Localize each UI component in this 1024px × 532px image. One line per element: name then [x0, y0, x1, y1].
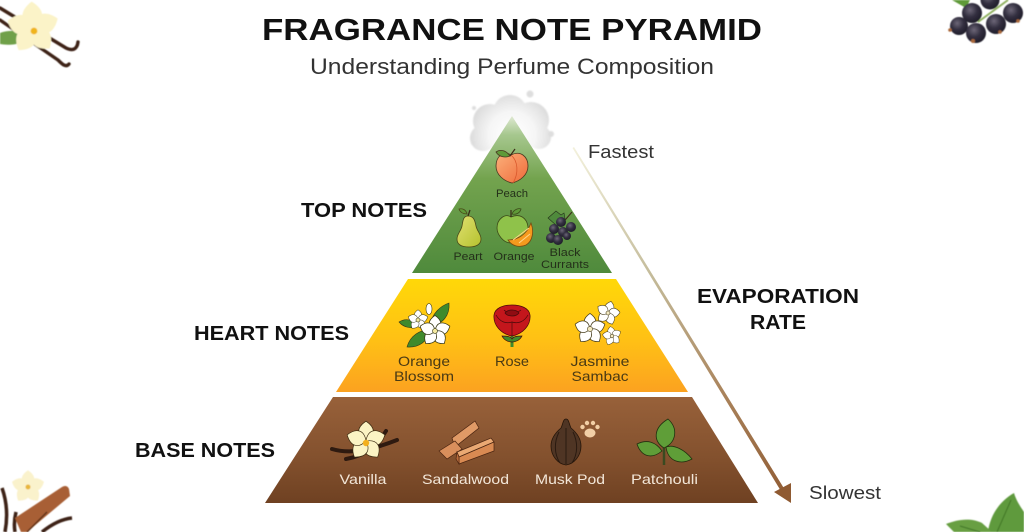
- text: jasmine sambac: Sambac: [572, 368, 628, 384]
- text: jasmine sambac: Jasmine: [570, 353, 630, 369]
- text: black currants: [541, 247, 590, 271]
- icon: black currants corner top right: [948, 0, 1023, 43]
- icon: jasmine sambac: [573, 298, 624, 348]
- icon: patchouli: [637, 419, 692, 465]
- text: black currants: Currants: [541, 259, 590, 271]
- heading: evaporation rate: [697, 286, 859, 334]
- icon: musk pod: [551, 419, 600, 465]
- text: pear: Peart: [454, 251, 482, 263]
- text: peach: Peach: [496, 188, 528, 200]
- text: orange blossom: Blossom: [394, 368, 454, 384]
- icon: orange blossom: [399, 303, 452, 347]
- heading: base notes: BASE NOTES: [135, 440, 275, 462]
- text: orange blossom: [394, 353, 454, 384]
- arrow: evaporation rate: [572, 147, 791, 503]
- icon: pear: [457, 209, 481, 247]
- text: fastest: Fastest: [588, 142, 654, 162]
- icon: vanilla: [332, 421, 397, 461]
- heading: evaporation rate: EVAPORATION: [697, 286, 859, 308]
- panel: base notes tier: [265, 397, 758, 503]
- heading: evaporation rate: RATE: [750, 312, 806, 334]
- heading: top notes: TOP NOTES: [301, 200, 427, 222]
- text: sandalwood: Sandalwood: [422, 471, 509, 487]
- panel: top notes tier: [412, 116, 612, 273]
- text: rose: Rose: [495, 353, 529, 369]
- icon: vanilla and cinnamon corner bottom left: [2, 470, 72, 532]
- text: orange: Orange: [494, 251, 534, 263]
- icon: cloud at the apex: [470, 90, 554, 156]
- heading: heart notes: HEART NOTES: [194, 323, 349, 345]
- text: musk pod: Musk Pod: [535, 471, 605, 487]
- icon: vanilla corner top left: [0, 0, 78, 66]
- icon: leaves corner bottom right: [946, 493, 1024, 532]
- icon: sandalwood: [439, 421, 494, 464]
- panel: heart notes tier: [336, 279, 688, 392]
- text: orange blossom: Orange: [398, 353, 450, 369]
- text: black currants: Black: [550, 247, 581, 259]
- icon: peach: [496, 149, 528, 183]
- text: jasmine sambac: [570, 353, 630, 384]
- icon: rose: [494, 305, 530, 347]
- subtitle: Understanding Perfume Composition: [310, 54, 714, 79]
- icon: black currants: [546, 211, 576, 245]
- text: vanilla: Vanilla: [340, 471, 387, 487]
- text: slowest: Slowest: [809, 483, 881, 503]
- icon: apple with orange slice: [497, 209, 533, 246]
- title: FRAGRANCE NOTE PYRAMID: [262, 12, 762, 47]
- text: patchouli: Patchouli: [631, 471, 698, 487]
